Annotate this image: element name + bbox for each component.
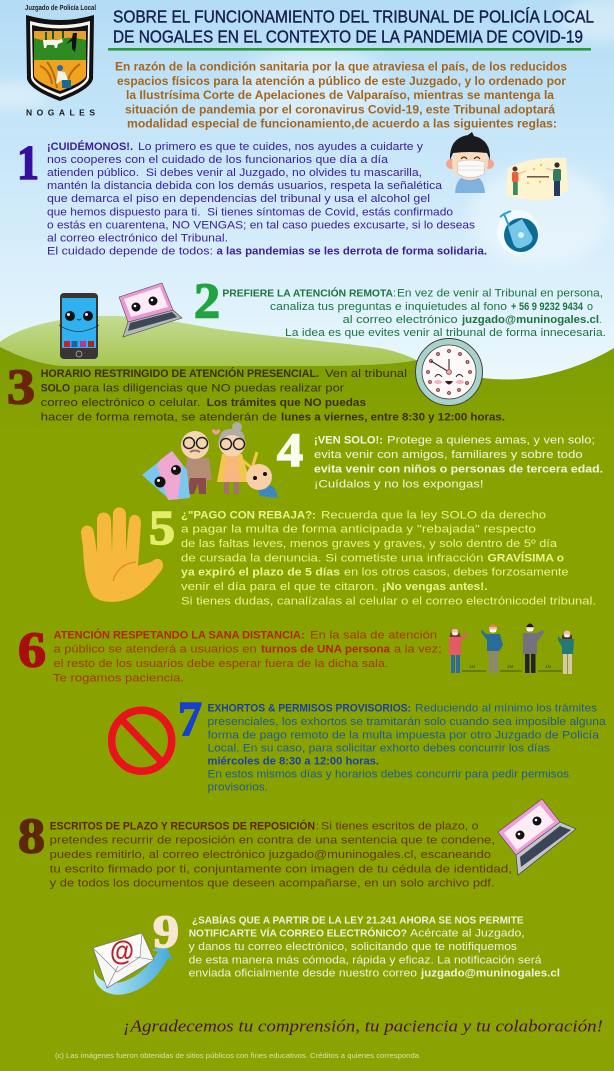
number 5: 5 [149, 500, 175, 555]
number 7: 7 [178, 691, 202, 746]
icon: prohibition sign [112, 710, 172, 771]
distance arrows: 1M [507, 664, 514, 669]
background: light green hill [0, 316, 420, 372]
rule 6 text: el resto de los usuarios debe esperar fuera de la dicha sala. [54, 658, 388, 670]
rule 9 text: Acércate al Juzgado, [410, 928, 525, 940]
icon: sanitizer gel bottle [497, 210, 539, 254]
hand shape [81, 507, 163, 602]
sparkles [527, 164, 542, 184]
rule 8 [18, 807, 512, 890]
rule 9 text: y danos tu correo electrónico, solicitando que te notifiquemos [189, 941, 518, 953]
rule 9 text: juzgado@muninogales.cl [420, 968, 560, 980]
laptop eyes [132, 302, 140, 312]
rule 3 text: Los trámites que NO puedas [207, 397, 366, 409]
intro paragraph [115, 60, 567, 130]
rule 7 text: presenciales, los exhortos se tramitarán solo cuando sea imposible alguna [208, 716, 607, 728]
lower scene: worker [56, 65, 71, 88]
number 6: 6 [18, 621, 46, 677]
rule 2 text: canaliza tus preguntas e inquietudes al fono [270, 301, 507, 313]
icon: smartphone [59, 293, 99, 359]
rule 1 text: al correo electrónico del Tribunal. [47, 232, 228, 244]
rule 2 text: En vez de venir al Tribunal en persona, [397, 288, 603, 300]
rule 9 [153, 906, 560, 980]
rule 2 text: : [393, 288, 396, 300]
rule 4 text: evita venir con amigos, familiares y sobre todo [314, 449, 583, 461]
number 1: 1 [17, 135, 39, 190]
number 8: 8 [18, 807, 45, 863]
rule 4 text: ¡VEN SOLO!: [314, 434, 383, 446]
clock face [422, 345, 476, 399]
rule 9 text: enviada oficialmente desde nuestro correo [189, 968, 417, 980]
white screen [124, 287, 168, 317]
rule 9 text: NOTIFICARTE VÍA CORREO ELECTRÓNICO? [189, 927, 407, 940]
rule 1 text: Lo primero es que te cuides, nos ayudes a cuidarte y [138, 141, 424, 153]
rule 4 [277, 424, 603, 490]
intro paragraph: En razón de la condición sanitaria por la que atraviesa el país, de los reducidos [115, 60, 567, 74]
rule 8 text [50, 819, 512, 890]
red circle [112, 710, 172, 771]
icon: couple keeping distance [506, 158, 568, 200]
rule 2 text: PREFIERE LA ATENCIÓN REMOTA [222, 287, 393, 300]
person 1 [449, 628, 468, 673]
distance arrows: 1M [545, 664, 552, 669]
rule 4 text: ¡Cuídalos y no los expongas! [314, 478, 484, 490]
pink screen frame [498, 799, 560, 855]
rule 7 text: provisorios. [208, 781, 268, 793]
pump [500, 211, 511, 226]
upper scene: farmer [66, 33, 77, 52]
rule 2 text: La idea es que evites venir al tribunal de forma innecesaria. [285, 327, 606, 339]
red slash [122, 720, 161, 761]
rule 9 text: de esta manera más cómoda, rápida y eficaz. La notificación será [189, 954, 542, 966]
clock hands [431, 359, 449, 372]
man [546, 162, 561, 196]
rule 7 text: Reduciendo al mínimo los trámites [415, 703, 598, 715]
shield outline [26, 15, 94, 101]
clock outer ring [416, 338, 482, 406]
rule 5 text: Si tienes dudas, canalízalas al celular o el correo electrónicodel tribunal. [181, 595, 596, 607]
rule 5 text: GRAVÍSIMA o [488, 551, 564, 564]
icon: child with mask [446, 132, 494, 193]
icon: smiling clock [416, 338, 482, 406]
rule 3 text: HORARIO RESTRINGIDO DE ATENCIÓN PRESENCIAL. [41, 367, 319, 380]
rule 3 text: para las diligencias que NO puedas realizar por [74, 383, 344, 395]
rule 5 text: de las faltas leves, menos graves y graves, y solo dentro de 5º día [181, 538, 558, 550]
baby [246, 464, 278, 498]
rule 2 text: o [587, 301, 593, 313]
rule 8 text: ESCRITOS DE PLAZO Y RECURSOS DE REPOSICIÓN [50, 819, 315, 832]
rule 3 text [41, 367, 505, 423]
child eyes [461, 157, 480, 159]
rule 2 text [222, 287, 606, 339]
keyboard base [516, 822, 576, 875]
intro paragraph: situación de pandemia por el coronavirus Covid-19, este Tribunal adoptará [125, 102, 555, 116]
rule 1 text: ¡CUIDÉMONOS!. [47, 140, 133, 153]
rule 6 text: En la sala de atención [310, 629, 437, 641]
rule 5 text: venir el día para el que te citaron. [181, 581, 378, 593]
background: sky [0, 0, 614, 400]
at sign: @ [110, 935, 134, 966]
lower scene: orange field [34, 60, 86, 91]
envelope flap [93, 933, 154, 988]
table with sanitizer [527, 176, 549, 178]
rule 1 text: El cuidado depende de todos: [47, 245, 213, 257]
rule 9 text [189, 913, 560, 980]
logo: Juzgado de Policía Local Nogales [25, 5, 96, 118]
icon: laptop (bottom) [498, 799, 576, 875]
shield white ring [30, 21, 90, 97]
image credits: (c) Las imágenes fueron obtenidas de sitios públicos con fines educativos. Créditos a quienes corresponda [55, 1051, 420, 1060]
lower scene: plants [40, 62, 80, 88]
rule 7 text: forma de pago remoto de la multa impuesta por otro Juzgado de Policía [208, 729, 600, 741]
rule 7 text: Local. En su caso, para solicitar exhorto debes concurrir los días [208, 742, 551, 754]
intro paragraph: modalidad especial de funcionamiento,de acuerdo a las siguientes reglas: [127, 116, 557, 130]
phone app icons [64, 341, 94, 347]
rule 1 text: nos cooperes con el cuidado de los funcionarios que día a día [47, 154, 389, 166]
icon: grandparents, baby and mask [142, 422, 278, 500]
rule 5 text: ¿"PAGO CON REBAJA?: [181, 509, 316, 521]
logo top caption: Juzgado de Policía Local [25, 5, 96, 12]
laptop eyes [516, 830, 524, 840]
upper scene: trees [45, 31, 64, 40]
rule 6 [18, 621, 442, 684]
rule 1 text: atienden público. Si debes venir al Juzgado, no olvides tu mascarilla, [47, 167, 422, 179]
grandpa [181, 431, 212, 494]
rule 2 [194, 272, 606, 339]
rule 7 text: EXHORTOS & PERMISOS PROVISORIOS: [208, 703, 411, 715]
rule 7 text: miércoles de 8:30 a 12:00 horas. [208, 755, 379, 767]
icon: people keeping 1 metre distance [449, 624, 574, 674]
rule 5 text: de cursada la denuncia. Si cometiste una infracción [181, 552, 484, 564]
intro paragraph: la Ilustrísima Corte de Apelaciones de Valparaíso, mientras se mantenga la [126, 88, 554, 102]
phone home button [76, 351, 82, 357]
woman [512, 166, 526, 195]
rule 1 text: mantén la distancia debida con los demás usuarios, respeta la señalética [47, 180, 443, 192]
rule 5 [149, 500, 596, 607]
phone screen [62, 298, 96, 348]
rule 5 text: Recuerda que la ley SOLO da derecho [321, 509, 546, 521]
white blur background [497, 210, 539, 254]
number 3: 3 [7, 358, 35, 414]
rule 7 text: En estos mismos días y horarios debes concurrir para pedir permisos [208, 768, 570, 780]
child hair [450, 132, 490, 160]
child face [452, 146, 488, 180]
number 2: 2 [194, 272, 220, 328]
rule 2 text: juzgado@muninogales.cl [461, 314, 599, 326]
icon: laptop (top) [119, 283, 182, 337]
rule 9 text: ¿SABÍAS QUE A PARTIR DE LA LEY 21.241 AHORA SE NOS PERMITE [192, 913, 524, 926]
rule 6 text: turnos de UNA persona [261, 644, 391, 656]
white screen [504, 805, 554, 850]
heart [212, 429, 220, 435]
distance arrows: 1M [469, 664, 476, 669]
rule 5 text: en los otros casos, debes forzosamente [344, 567, 568, 579]
rule 5 text [181, 509, 596, 607]
rule 7 text [208, 703, 607, 793]
rule 8 text: : [316, 820, 319, 832]
intro paragraph: espacios físicos para la atención a público de este Juzgado, y lo ordenado por [117, 74, 566, 88]
rule 4 text: Protege a quienes amas, y ven solo; [387, 434, 595, 446]
rule 2 text: + 56 9 9232 9434 [511, 301, 584, 313]
rule 2 text: . [599, 314, 602, 326]
grandma [217, 422, 257, 494]
rule 7 [178, 691, 607, 793]
upper scene: cows [43, 39, 63, 48]
rule 3 text: hacer de forma remota, se atenderán de [41, 411, 277, 423]
upper scene: hills [34, 31, 86, 40]
rule 1 text: a las pandemias se les derrota de forma solidaria. [216, 245, 487, 257]
upper scene: field [34, 31, 86, 60]
number 9: 9 [153, 906, 179, 958]
person 3 [523, 624, 544, 673]
mask character [142, 451, 190, 500]
rule 6 text: Te rogamos paciencia. [53, 672, 184, 684]
rule 4 text: evita venir con niños o personas de tercera edad. [314, 463, 603, 475]
icon: email envelope with arrow [93, 933, 173, 995]
pink screen frame [119, 283, 173, 322]
background: clouds [0, 0, 614, 265]
dark teal circle [504, 218, 538, 252]
rule 1 text: que demarca el piso en dependencias del tribunal y usa el alcohol gel [47, 193, 430, 205]
rule 6 text: a público se atenderá a usuarios en [54, 644, 257, 656]
child body [455, 177, 485, 193]
phone smile and necklace [59, 319, 99, 332]
rule 3 text: SOLO [41, 383, 70, 395]
rule 1 text [47, 140, 487, 257]
rule 4 text [314, 434, 603, 490]
child ears [446, 159, 456, 169]
envelope body [93, 933, 154, 988]
rule 1 text: o estás en cuarentena, NO VENGAS; en tal caso puedes excusarte, si lo deseas [47, 219, 476, 231]
rule 5 text: ¡No vengas antes!. [382, 581, 488, 593]
blue swoosh arrow [94, 945, 173, 995]
clock eyes, smile, cheeks [435, 374, 463, 377]
child mask [457, 160, 485, 178]
rule 6 text: a la vez; [394, 644, 442, 656]
distance arrows [462, 664, 562, 671]
closing message: ¡Agradecemos tu comprensión, tu paciencia y tu colaboración! [123, 1017, 603, 1036]
title underline [108, 48, 591, 51]
rule 3 text: Ven al tribunal [325, 368, 407, 380]
keyboard base [123, 310, 182, 337]
rule 2 text: al correo electrónico [343, 314, 458, 326]
rule 3 text: correo electrónico o celular. [41, 397, 201, 409]
rule 6 text: ATENCIÓN RESPETANDO LA SANA DISTANCIA: [54, 628, 305, 641]
rule 3 [7, 358, 505, 423]
rule 3 text: lunes a viernes, entre 8:30 y 12:00 horas. [281, 411, 505, 423]
rule 8 text: tu escrito firmado por ti, conjuntamente con imagen de tu cédula de identidad, [50, 863, 512, 875]
logo caption NOGALES: NOGALES [26, 108, 95, 118]
hand crease [113, 562, 136, 581]
rule 1 [17, 135, 487, 257]
rule 8 text: pretendes recurrir de reposición en contra de una sentencia que te condene, [50, 835, 495, 847]
cream background [506, 158, 568, 200]
rule 1 text: que hemos dispuesto para ti. Si tienes síntomas de Covid, estás confirmado [47, 206, 453, 218]
background: dark green ground [0, 347, 614, 1071]
icon: stop hand [81, 507, 163, 602]
rule 6 text [53, 628, 442, 684]
person 2 [481, 624, 503, 673]
number 4: 4 [277, 424, 303, 477]
person 4 [558, 630, 574, 674]
bottle droplet [518, 232, 524, 238]
rule 8 text: puedes remitirlo, al correo electrónico juzgado@muninogales.cl, escaneando [50, 849, 491, 861]
phone body [60, 293, 98, 359]
bottle [508, 219, 532, 248]
phone eyes [65, 311, 93, 321]
title [113, 7, 594, 47]
rule 8 text: Si tienes escritos de plazo, o [321, 820, 478, 832]
rule 8 text: y de todos los documentos que deseen acompañarse, en un solo archivo pdf. [50, 878, 495, 890]
clock hour marks [427, 350, 471, 394]
rule 5 text: ya expiró el plazo de 5 días [181, 567, 340, 579]
rule 5 text: a pagar la multa de forma anticipada y "rebajada" respecto [181, 524, 536, 536]
shield inner frame [32, 25, 88, 94]
